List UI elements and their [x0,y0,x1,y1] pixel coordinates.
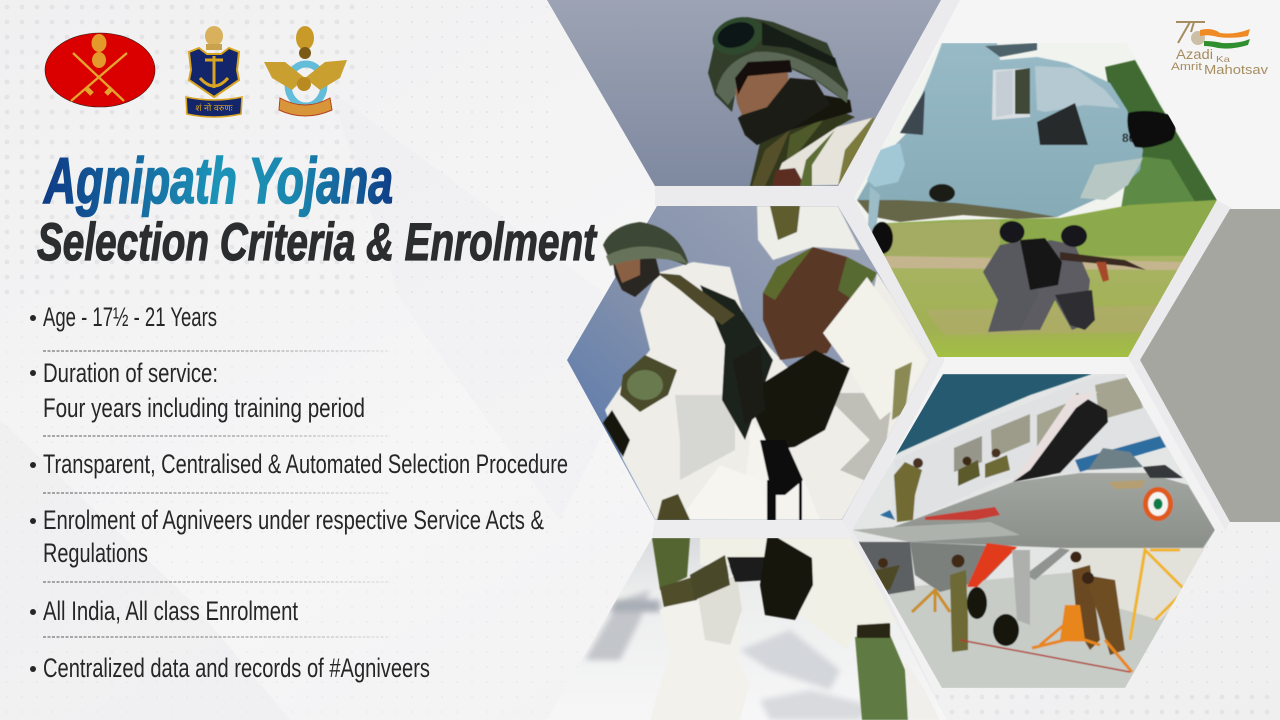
logo: Azadi Ka Amrit Mahotsav [1171,22,1269,77]
crew [894,462,922,522]
soldiers [983,240,1040,332]
photo: helicopter and soldiers: 80 [1122,131,1136,145]
logo: Azadi Ka Amrit Mahotsav: Ka [1216,54,1230,64]
bullet: age: Age - 17½ - 21 Years [43,302,217,332]
bullet: duration of service: Duration of service: [43,358,218,388]
photo: soldier portrait in helmet [540,0,950,190]
logo: Azadi Ka Amrit Mahotsav: Amrit [1171,61,1202,73]
heading: Agnipath Yojana: Agnipath Yojana [43,144,393,217]
logo: Azadi Ka Amrit Mahotsav: Mahotsav [1204,62,1269,77]
bullet: duration of service [30,358,365,423]
heli fuselage [857,43,1143,220]
emblem: Indian Air Force [264,26,347,116]
bullet: enrolment under service acts: Enrolment of Agniveers under respective Service Acts & [43,505,544,535]
fuselage [853,473,1215,548]
emblem: Indian Navy [186,26,242,117]
grey hexagon panel [1140,209,1280,522]
second soldier [757,206,860,260]
title [37,144,598,272]
bullet: enrolment under service acts: Regulations [43,538,148,568]
emblem: Indian Army [45,33,155,107]
bullet: age [30,302,217,332]
bullet: enrolment under service acts [30,505,544,568]
bullet: duration of service: Four years including training period [43,393,365,423]
photo: soldiers in white camouflage [560,200,940,525]
soldier head breaking out of frame [603,222,688,297]
logo: Azadi Ka Amrit Mahotsav: Azadi [1176,46,1213,62]
floor and rear [889,572,1168,688]
criteria list [30,302,568,683]
bullet: centralized data: Centralized data and records of #Agniveers [43,653,430,683]
photo: fighter jet in hangar [850,372,1220,692]
bullet: all India enrolment: All India, All class Enrolment [43,596,298,626]
heading: Selection Criteria and Enrolment: Selection Criteria & Enrolment [37,213,598,272]
photo: soldier legs in snow [540,535,960,720]
photo: helicopter and soldiers [850,40,1220,360]
emblem: Indian Navy: शं नो वरुणः [195,102,233,113]
lower white mass [605,262,935,520]
bullet: selection procedure: Transparent, Centralised & Automated Selection Procedure [43,449,568,479]
